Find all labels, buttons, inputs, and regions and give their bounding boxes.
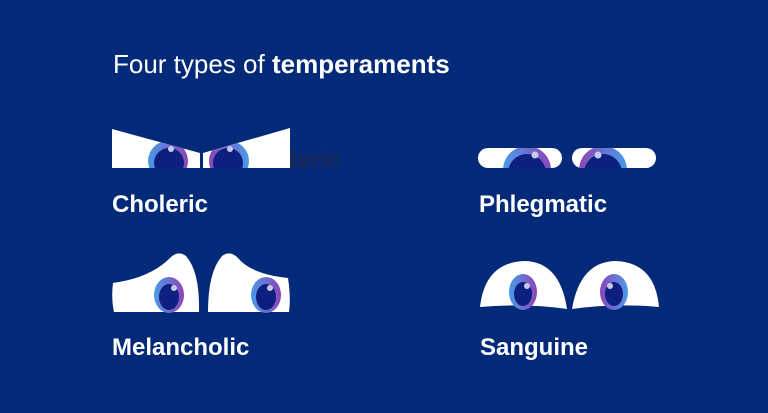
title: Four types of temperaments <box>113 49 450 79</box>
eyes: phlegmatic <box>478 148 656 168</box>
label: Sanguine: Sanguine <box>480 334 588 361</box>
ghost text: leric <box>290 146 342 174</box>
label: Phlegmatic: Phlegmatic <box>479 191 607 218</box>
eyes: choleric <box>112 128 290 168</box>
eyes: sanguine <box>480 261 659 310</box>
label: Choleric: Choleric <box>112 191 208 218</box>
eyes: melancholic <box>112 253 290 313</box>
label: Melancholic: Melancholic <box>112 334 249 361</box>
